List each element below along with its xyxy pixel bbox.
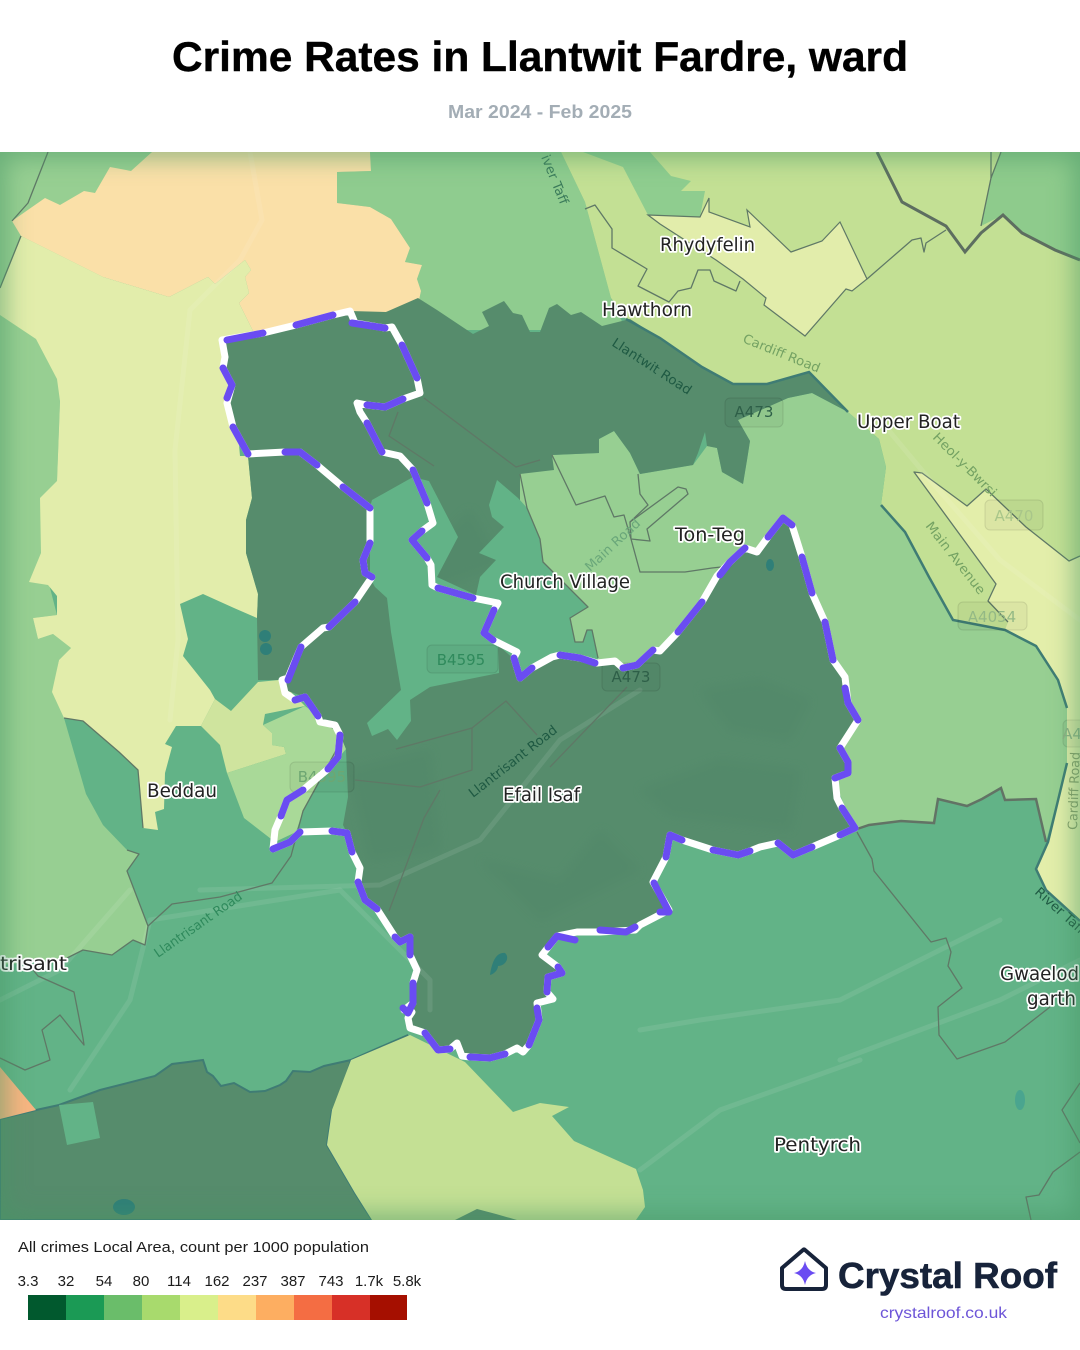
thick boundary north-east <box>877 152 1080 260</box>
road labels: Llantrisant Road <box>152 889 245 961</box>
road labels: Main Road <box>582 516 644 575</box>
place labels: Pentyrch <box>774 1134 861 1156</box>
place labels: garth <box>1027 988 1076 1010</box>
place labels <box>0 234 1079 1156</box>
place labels: Hawthorn <box>602 299 692 321</box>
map edge vignette <box>0 152 1080 1220</box>
region: east and Ton-Teg light green <box>518 393 1067 842</box>
region: orange south-west corner <box>0 1067 36 1119</box>
region: small green patch south-west <box>59 1102 100 1145</box>
road labels: Main Avenue <box>922 519 988 598</box>
road shield labels: A473 <box>735 403 773 421</box>
legend values: 114 <box>167 1273 191 1290</box>
road shield labels: B4595 <box>298 768 346 786</box>
ward boundary: purple dashes <box>223 315 858 1058</box>
subtitle: date range: Mar 2024 - Feb 2025 <box>448 102 632 122</box>
map panel <box>0 152 1080 1220</box>
legend values: 32 <box>58 1273 74 1290</box>
legend values: 237 <box>242 1273 268 1290</box>
legend values: 3.3 <box>18 1273 38 1290</box>
water ponds <box>113 559 1025 1215</box>
region: north light green <box>337 152 626 330</box>
region: small dark corner south <box>455 1209 517 1220</box>
roads <box>0 152 1080 1170</box>
road labels <box>152 153 1080 961</box>
region: southern patch pale green <box>327 1035 645 1220</box>
place labels: trisant <box>0 953 67 975</box>
road shield labels: A470 <box>995 507 1033 525</box>
region: Main Avenue pale yellow <box>914 472 1080 921</box>
region: top centre light green <box>583 152 705 217</box>
region: top right light green <box>981 152 1080 260</box>
legend values: 5.8k <box>393 1273 422 1290</box>
region: Church Village medium green <box>367 477 598 740</box>
legend values <box>18 1273 422 1290</box>
region: B4595 light green <box>227 706 346 842</box>
road shields <box>290 398 1080 792</box>
place labels: Church Village <box>500 571 630 593</box>
road shield labels: A4054 <box>968 608 1016 626</box>
icon: house with star <box>782 1250 826 1289</box>
legend values: 387 <box>280 1273 306 1290</box>
region: base medium green <box>0 152 1080 1220</box>
legend values: 162 <box>204 1273 230 1290</box>
legend values: 743 <box>318 1273 344 1290</box>
region: forest shading in ward <box>350 510 810 920</box>
region: central dark green with ward <box>222 298 858 1058</box>
place labels: Upper Boat <box>857 411 960 433</box>
road labels: Cardiff Road <box>741 332 822 376</box>
region: pale yellow west <box>0 236 258 830</box>
legend colour bar <box>28 1295 407 1320</box>
region: north-east yellow green <box>561 152 1080 921</box>
region: southern dark green <box>0 1035 408 1220</box>
logo wordmark: Crystal Roof <box>838 1255 1058 1296</box>
legend values: 80 <box>133 1273 149 1290</box>
road labels: iver Taff <box>537 153 571 208</box>
region: Rhydyfelin pale yellow <box>648 198 867 336</box>
legend scale <box>18 1273 422 1320</box>
outline: Main Avenue patch <box>914 472 1080 622</box>
road shield labels: A473 <box>612 668 650 686</box>
thick boundary east <box>857 788 1046 842</box>
place labels: Beddau <box>147 780 217 802</box>
logo: Crystal Roof <box>780 1247 1058 1296</box>
ward boundary: white outline <box>222 311 858 1058</box>
place labels: Efail Isaf <box>503 784 581 806</box>
legend title: All crimes Local Area, count per 1000 population <box>18 1239 369 1256</box>
website link text: crystalroof.co.uk <box>880 1305 1008 1322</box>
river Taff <box>626 319 1080 921</box>
place labels: Rhydyfelin <box>660 234 755 256</box>
legend values: 1.7k <box>355 1273 384 1290</box>
place labels: Ton-Teg <box>674 524 745 546</box>
region: Beddau east yellow green <box>201 680 305 773</box>
boundary lines <box>0 152 1080 1220</box>
region: peach north-west <box>12 152 422 335</box>
road shield labels <box>298 403 1080 786</box>
road labels: Llantwit Road <box>609 336 694 398</box>
road labels: Heol-y-Bwrsi <box>929 430 999 500</box>
road labels: Llantrisant Road <box>466 723 561 801</box>
legend values: 54 <box>96 1273 112 1290</box>
title: Crime Rates in Llantwit Fardre, ward <box>172 33 908 80</box>
region: west light green <box>0 152 152 965</box>
road shield labels: B4595 <box>437 651 485 669</box>
